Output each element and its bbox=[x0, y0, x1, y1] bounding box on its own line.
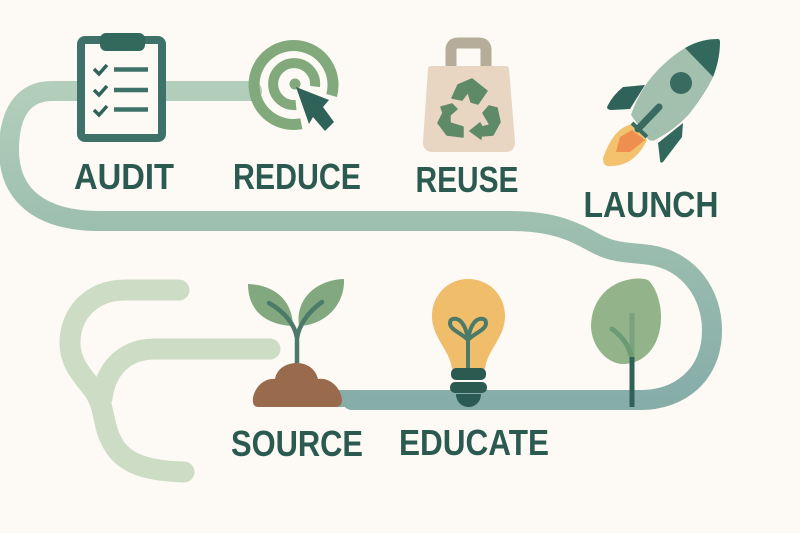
winding path bbox=[9, 91, 712, 472]
icon: rocket bbox=[603, 39, 720, 166]
icon: tree bbox=[591, 279, 661, 407]
icon: sprout in soil bbox=[248, 279, 344, 407]
label: LAUNCH: LAUNCH bbox=[584, 184, 718, 225]
label: REDUCE: REDUCE bbox=[233, 156, 361, 197]
label: AUDIT: AUDIT bbox=[74, 156, 174, 197]
icon: target with cursor bbox=[254, 45, 334, 131]
icon: recycling bag bbox=[423, 43, 515, 152]
recycling arrows bbox=[438, 79, 500, 139]
label: SOURCE: SOURCE bbox=[231, 423, 363, 464]
label: EDUCATE: EDUCATE bbox=[399, 422, 549, 463]
label: REUSE: REUSE bbox=[416, 159, 518, 200]
icon: clipboard bbox=[81, 33, 162, 138]
icon: light bulb bbox=[432, 279, 505, 407]
